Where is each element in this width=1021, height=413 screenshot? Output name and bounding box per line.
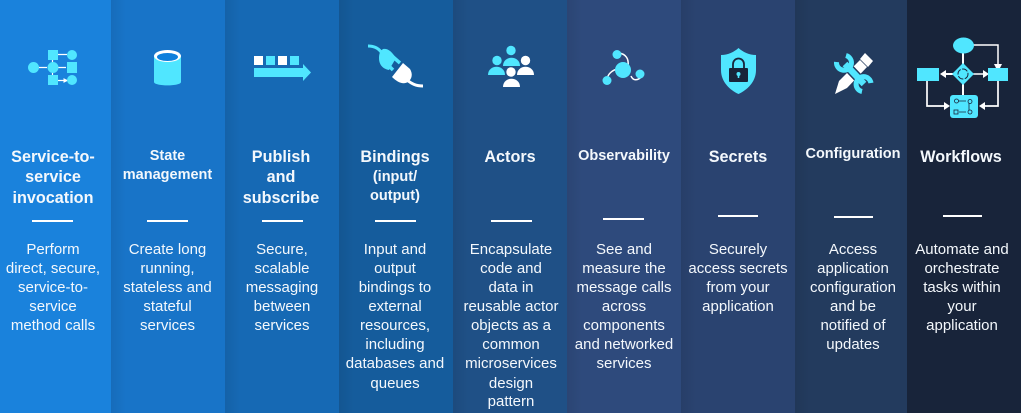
panel: actors [453, 0, 567, 413]
icon: service network [28, 50, 77, 85]
description: and networked [575, 336, 673, 353]
description [123, 241, 212, 334]
description: including [365, 336, 425, 353]
heading: management [123, 167, 212, 183]
description: scalable [254, 260, 310, 277]
description: Create long [129, 241, 206, 258]
description: external [368, 298, 422, 315]
description: pattern [488, 393, 534, 410]
heading: Secrets [709, 148, 767, 166]
description: Secure, [256, 241, 308, 258]
description: and be [830, 298, 876, 315]
icon: plug and socket [368, 46, 423, 86]
icon: message queue arrow [254, 56, 311, 81]
description: services [254, 317, 310, 334]
description: notified of [820, 317, 886, 334]
heading: Actors [484, 148, 536, 166]
heading: invocation [13, 189, 93, 207]
heading: output) [370, 188, 420, 204]
description: direct, secure, [6, 260, 100, 277]
heading: Configuration [805, 146, 901, 162]
description: across [602, 298, 646, 315]
description: components [583, 317, 665, 334]
description: bindings to [359, 279, 431, 296]
heading: State [150, 148, 185, 164]
icon: wrench and pencil [835, 53, 873, 94]
heading: (input/ [373, 169, 417, 185]
description: queues [370, 375, 420, 392]
description: access secrets [688, 260, 788, 277]
heading: and [267, 168, 295, 186]
icon: shield with lock [721, 48, 756, 94]
panel: state management [111, 0, 225, 413]
heading [11, 148, 95, 207]
description [810, 241, 896, 353]
description: orchestrate [924, 260, 1000, 277]
description: Automate and [915, 241, 1009, 258]
panel: service-to-service invocation [0, 0, 111, 413]
panel: bindings [339, 0, 453, 413]
description [463, 241, 559, 410]
icon: connected nodes [602, 50, 644, 85]
description: data in [488, 279, 534, 296]
description: between [254, 298, 310, 315]
heading: service [25, 168, 81, 186]
description: method calls [11, 317, 95, 334]
description: Input and [364, 241, 426, 258]
description: service [29, 298, 77, 315]
description: design [489, 375, 533, 392]
description: objects as a [471, 317, 552, 334]
description: configuration [810, 279, 896, 296]
description: stateless and [123, 279, 212, 296]
description: common [482, 336, 540, 353]
description: application [817, 260, 889, 277]
description: code and [480, 260, 542, 277]
description: Access [829, 241, 877, 258]
description: stateful [143, 298, 192, 315]
heading: Publish [252, 148, 310, 166]
description [6, 241, 100, 334]
heading [360, 148, 430, 204]
description: microservices [465, 355, 557, 372]
description: Perform [26, 241, 80, 258]
description: service-to- [18, 279, 88, 296]
panel: publish and subscribe [225, 0, 339, 413]
description: Securely [709, 241, 768, 258]
panel: secrets [681, 0, 795, 413]
description: services [140, 317, 195, 334]
description: measure the [582, 260, 666, 277]
description: your [947, 298, 977, 315]
heading: Workflows [920, 148, 1002, 166]
description [575, 241, 673, 372]
heading [123, 148, 212, 183]
panel: workflows [907, 0, 1021, 413]
heading: Observability [578, 148, 670, 164]
description: application [926, 317, 998, 334]
description: resources, [360, 317, 430, 334]
description: See and [596, 241, 652, 258]
description [346, 241, 444, 392]
description: from your [706, 279, 770, 296]
heading: subscribe [243, 189, 319, 207]
description: output [374, 260, 417, 277]
description: message calls [576, 279, 672, 296]
icon: workflow diagram [917, 38, 1008, 118]
heading: Bindings [360, 148, 430, 166]
description: databases and [346, 355, 444, 372]
description: tasks within [923, 279, 1001, 296]
icon: database [154, 50, 181, 85]
description: messaging [246, 279, 318, 296]
description: services [596, 355, 652, 372]
heading: Service-to- [11, 148, 95, 166]
panel: configuration [795, 0, 907, 413]
description [246, 241, 318, 334]
description [688, 241, 788, 315]
description: updates [826, 336, 880, 353]
icon: group of people [488, 46, 534, 87]
panel: observability [567, 0, 681, 413]
heading [243, 148, 319, 207]
description: application [702, 298, 774, 315]
description: Encapsulate [470, 241, 552, 258]
description [915, 241, 1009, 334]
description: running, [140, 260, 195, 277]
description: reusable actor [463, 298, 559, 315]
